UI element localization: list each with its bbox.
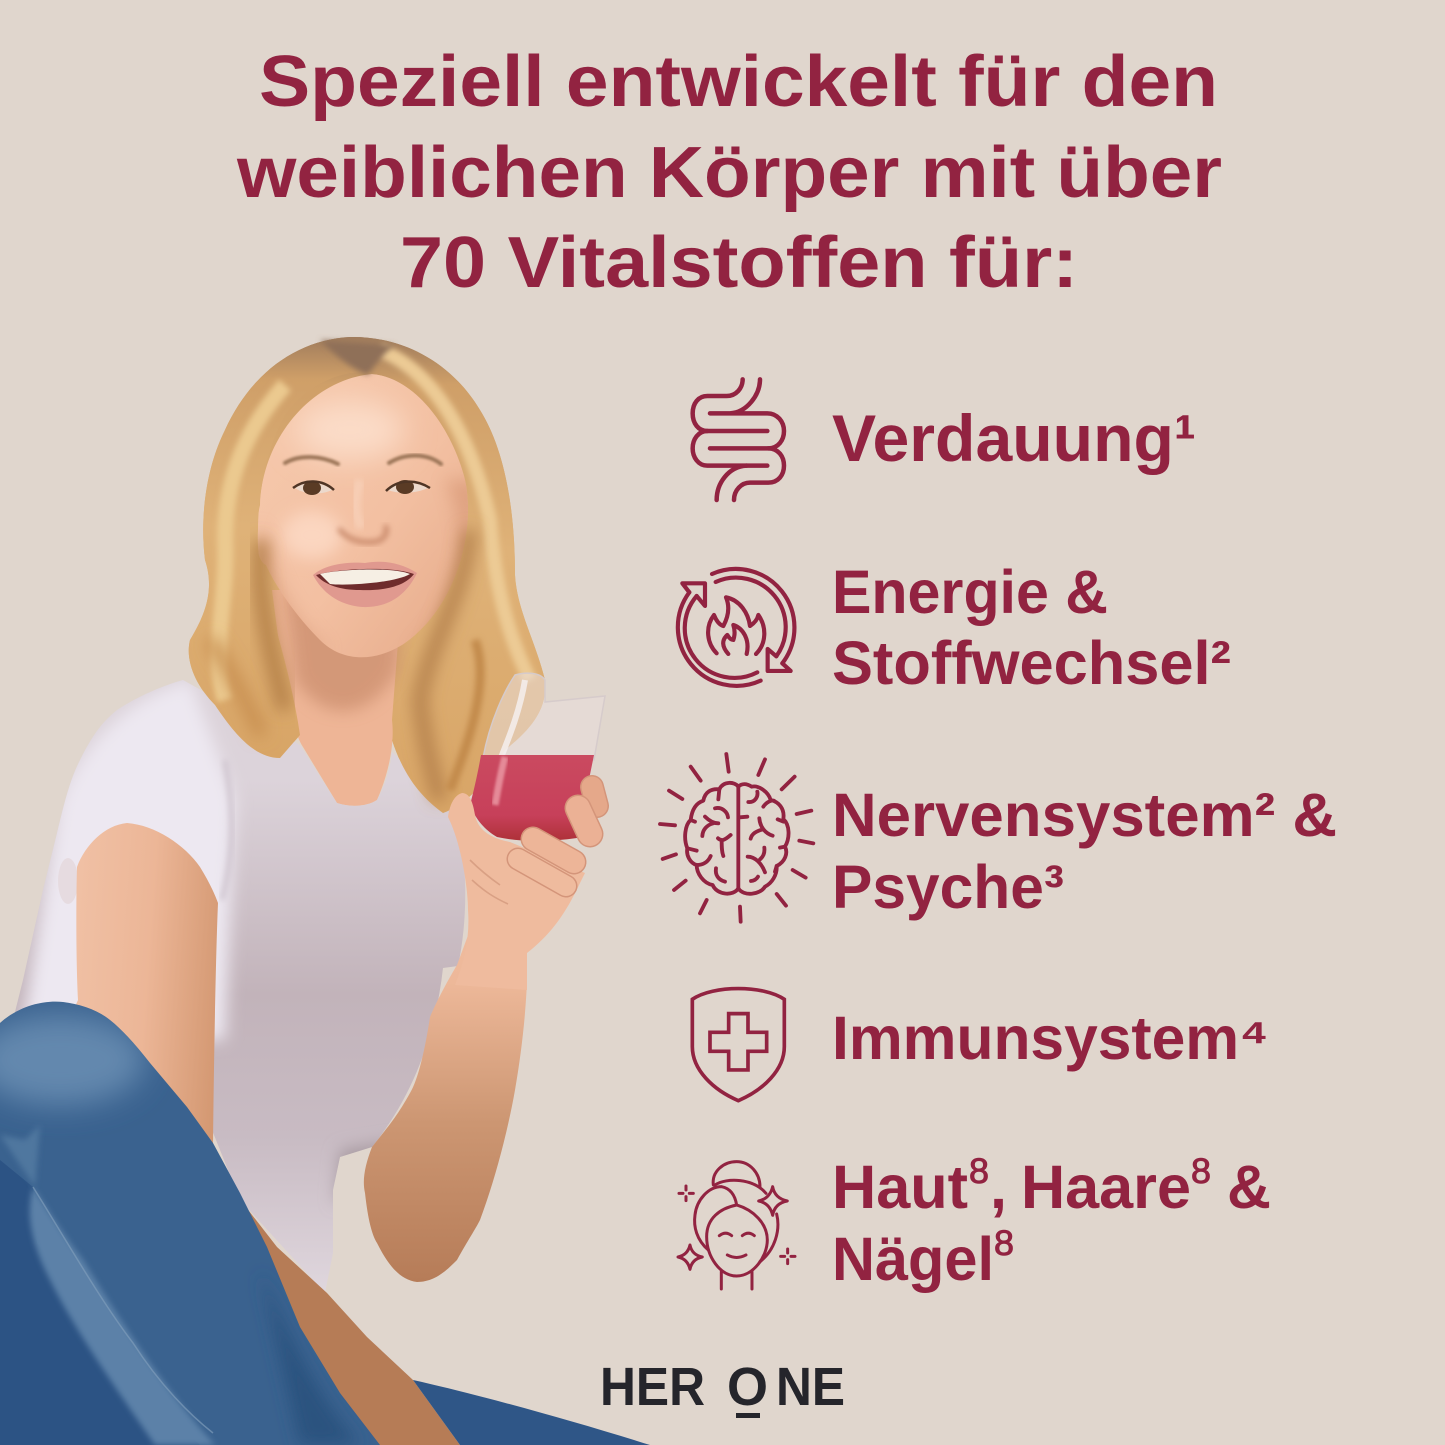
icon: woman's face with sparkles <box>678 1162 795 1289</box>
left arm <box>60 823 250 1220</box>
hair front strands <box>189 337 372 758</box>
label: Haut, Haare & Nägel: , <box>990 1153 1007 1221</box>
label: Verdauung: Verdauung¹ <box>832 401 1196 475</box>
lower arm <box>240 1202 460 1445</box>
hand <box>448 787 597 990</box>
jeans: rear leg <box>413 1380 650 1445</box>
label: Haut, Haare & Nägel: 8 <box>994 1224 1014 1263</box>
label: Haut, Haare & Nägel <box>832 1152 1271 1293</box>
icon: flame in cycle <box>678 569 794 686</box>
benefit: Energie & Stoffwechsel <box>678 558 1231 697</box>
eyebrows <box>285 456 441 464</box>
label: Haut, Haare & Nägel: & <box>1227 1153 1271 1221</box>
benefit: Nervensystem & Psyche <box>660 754 1337 922</box>
label: Nervensystem & Psyche: Psyche³ <box>832 853 1064 921</box>
logo: HER ONE: NE <box>776 1357 845 1417</box>
shirt <box>15 680 466 1292</box>
face <box>256 374 468 657</box>
benefit: Haut, Haare & Nägel <box>678 1152 1271 1293</box>
label: Haut, Haare & Nägel: Haare <box>1021 1153 1191 1221</box>
label: Nervensystem & Psyche: Nervensystem² & <box>832 781 1337 849</box>
mouth <box>313 562 417 607</box>
icon: brain with rays <box>660 754 813 922</box>
jeans: raised knee <box>0 990 400 1445</box>
label: Haut, Haare & Nägel: 8 <box>969 1152 989 1191</box>
icon: shield with cross <box>692 989 784 1101</box>
logo: HER ONE: O <box>727 1357 768 1417</box>
photo: smiling woman holding a red drink <box>0 337 650 1445</box>
forearm <box>364 930 527 1282</box>
label: Nervensystem & Psyche <box>832 781 1337 921</box>
label: Haut, Haare & Nägel: Nägel <box>832 1225 994 1293</box>
label: Energie & Stoffwechsel <box>832 558 1231 697</box>
hair back <box>189 337 545 813</box>
glass <box>470 673 605 841</box>
title: weiblichen Körper mit über <box>236 133 1222 213</box>
benefit: Immunsystem <box>692 989 1269 1101</box>
sleeve inner <box>58 858 78 904</box>
title: 70 Vitalstoffen für: <box>400 223 1078 303</box>
title: Speziell entwickelt für den <box>259 42 1218 122</box>
benefit: Verdauung <box>693 379 1196 500</box>
logo: HER ONE: HER <box>600 1357 705 1417</box>
label: Energie & Stoffwechsel: Energie & <box>832 558 1108 626</box>
nose <box>340 527 386 542</box>
label: Haut, Haare & Nägel: Haut <box>832 1153 968 1221</box>
title <box>236 42 1222 303</box>
neck <box>272 590 402 806</box>
label: Immunsystem: Immunsystem⁴ <box>832 1004 1269 1072</box>
logo: HER ONE <box>600 1357 845 1418</box>
icon: intestine <box>693 379 784 500</box>
label: Energie & Stoffwechsel: Stoffwechsel² <box>832 629 1231 697</box>
label: Haut, Haare & Nägel: 8 <box>1191 1152 1211 1191</box>
eyes <box>293 480 430 495</box>
